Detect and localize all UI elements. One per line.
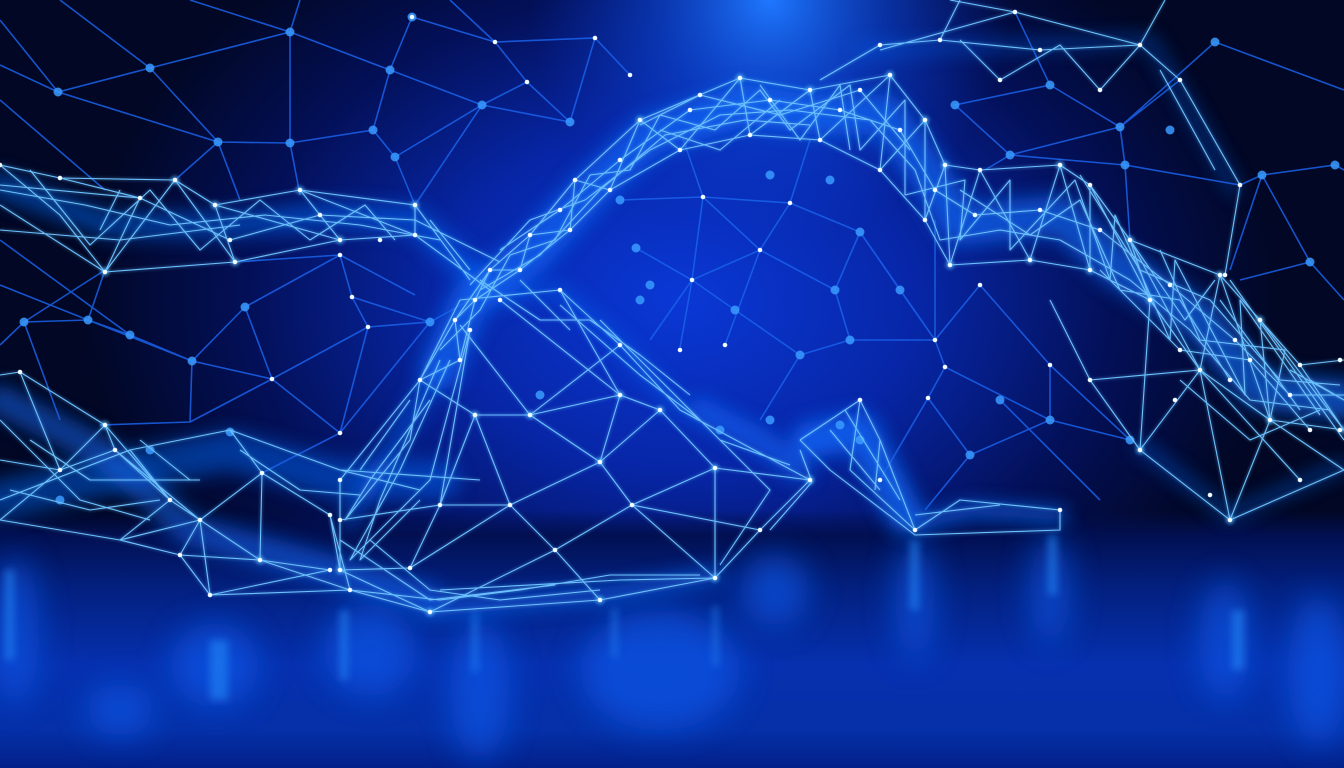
diamond mesh bbox=[340, 290, 810, 612]
bright node glow bbox=[105, 75, 1344, 612]
left ribbon bbox=[0, 165, 500, 290]
lower-left ribbon bbox=[0, 372, 430, 612]
rear mesh lines bbox=[0, 0, 1344, 510]
reflective floor with light streaks bbox=[0, 510, 1344, 768]
soft glow of mesh ribbons bbox=[0, 40, 1344, 610]
arch ribbon bbox=[420, 75, 1344, 380]
ribbon mesh lines bbox=[0, 0, 1344, 612]
right and top ribbons bbox=[800, 400, 1060, 535]
rear mesh nodes bbox=[24, 17, 1335, 500]
bright nodes bbox=[0, 12, 1340, 612]
line bloom bbox=[0, 0, 1344, 612]
